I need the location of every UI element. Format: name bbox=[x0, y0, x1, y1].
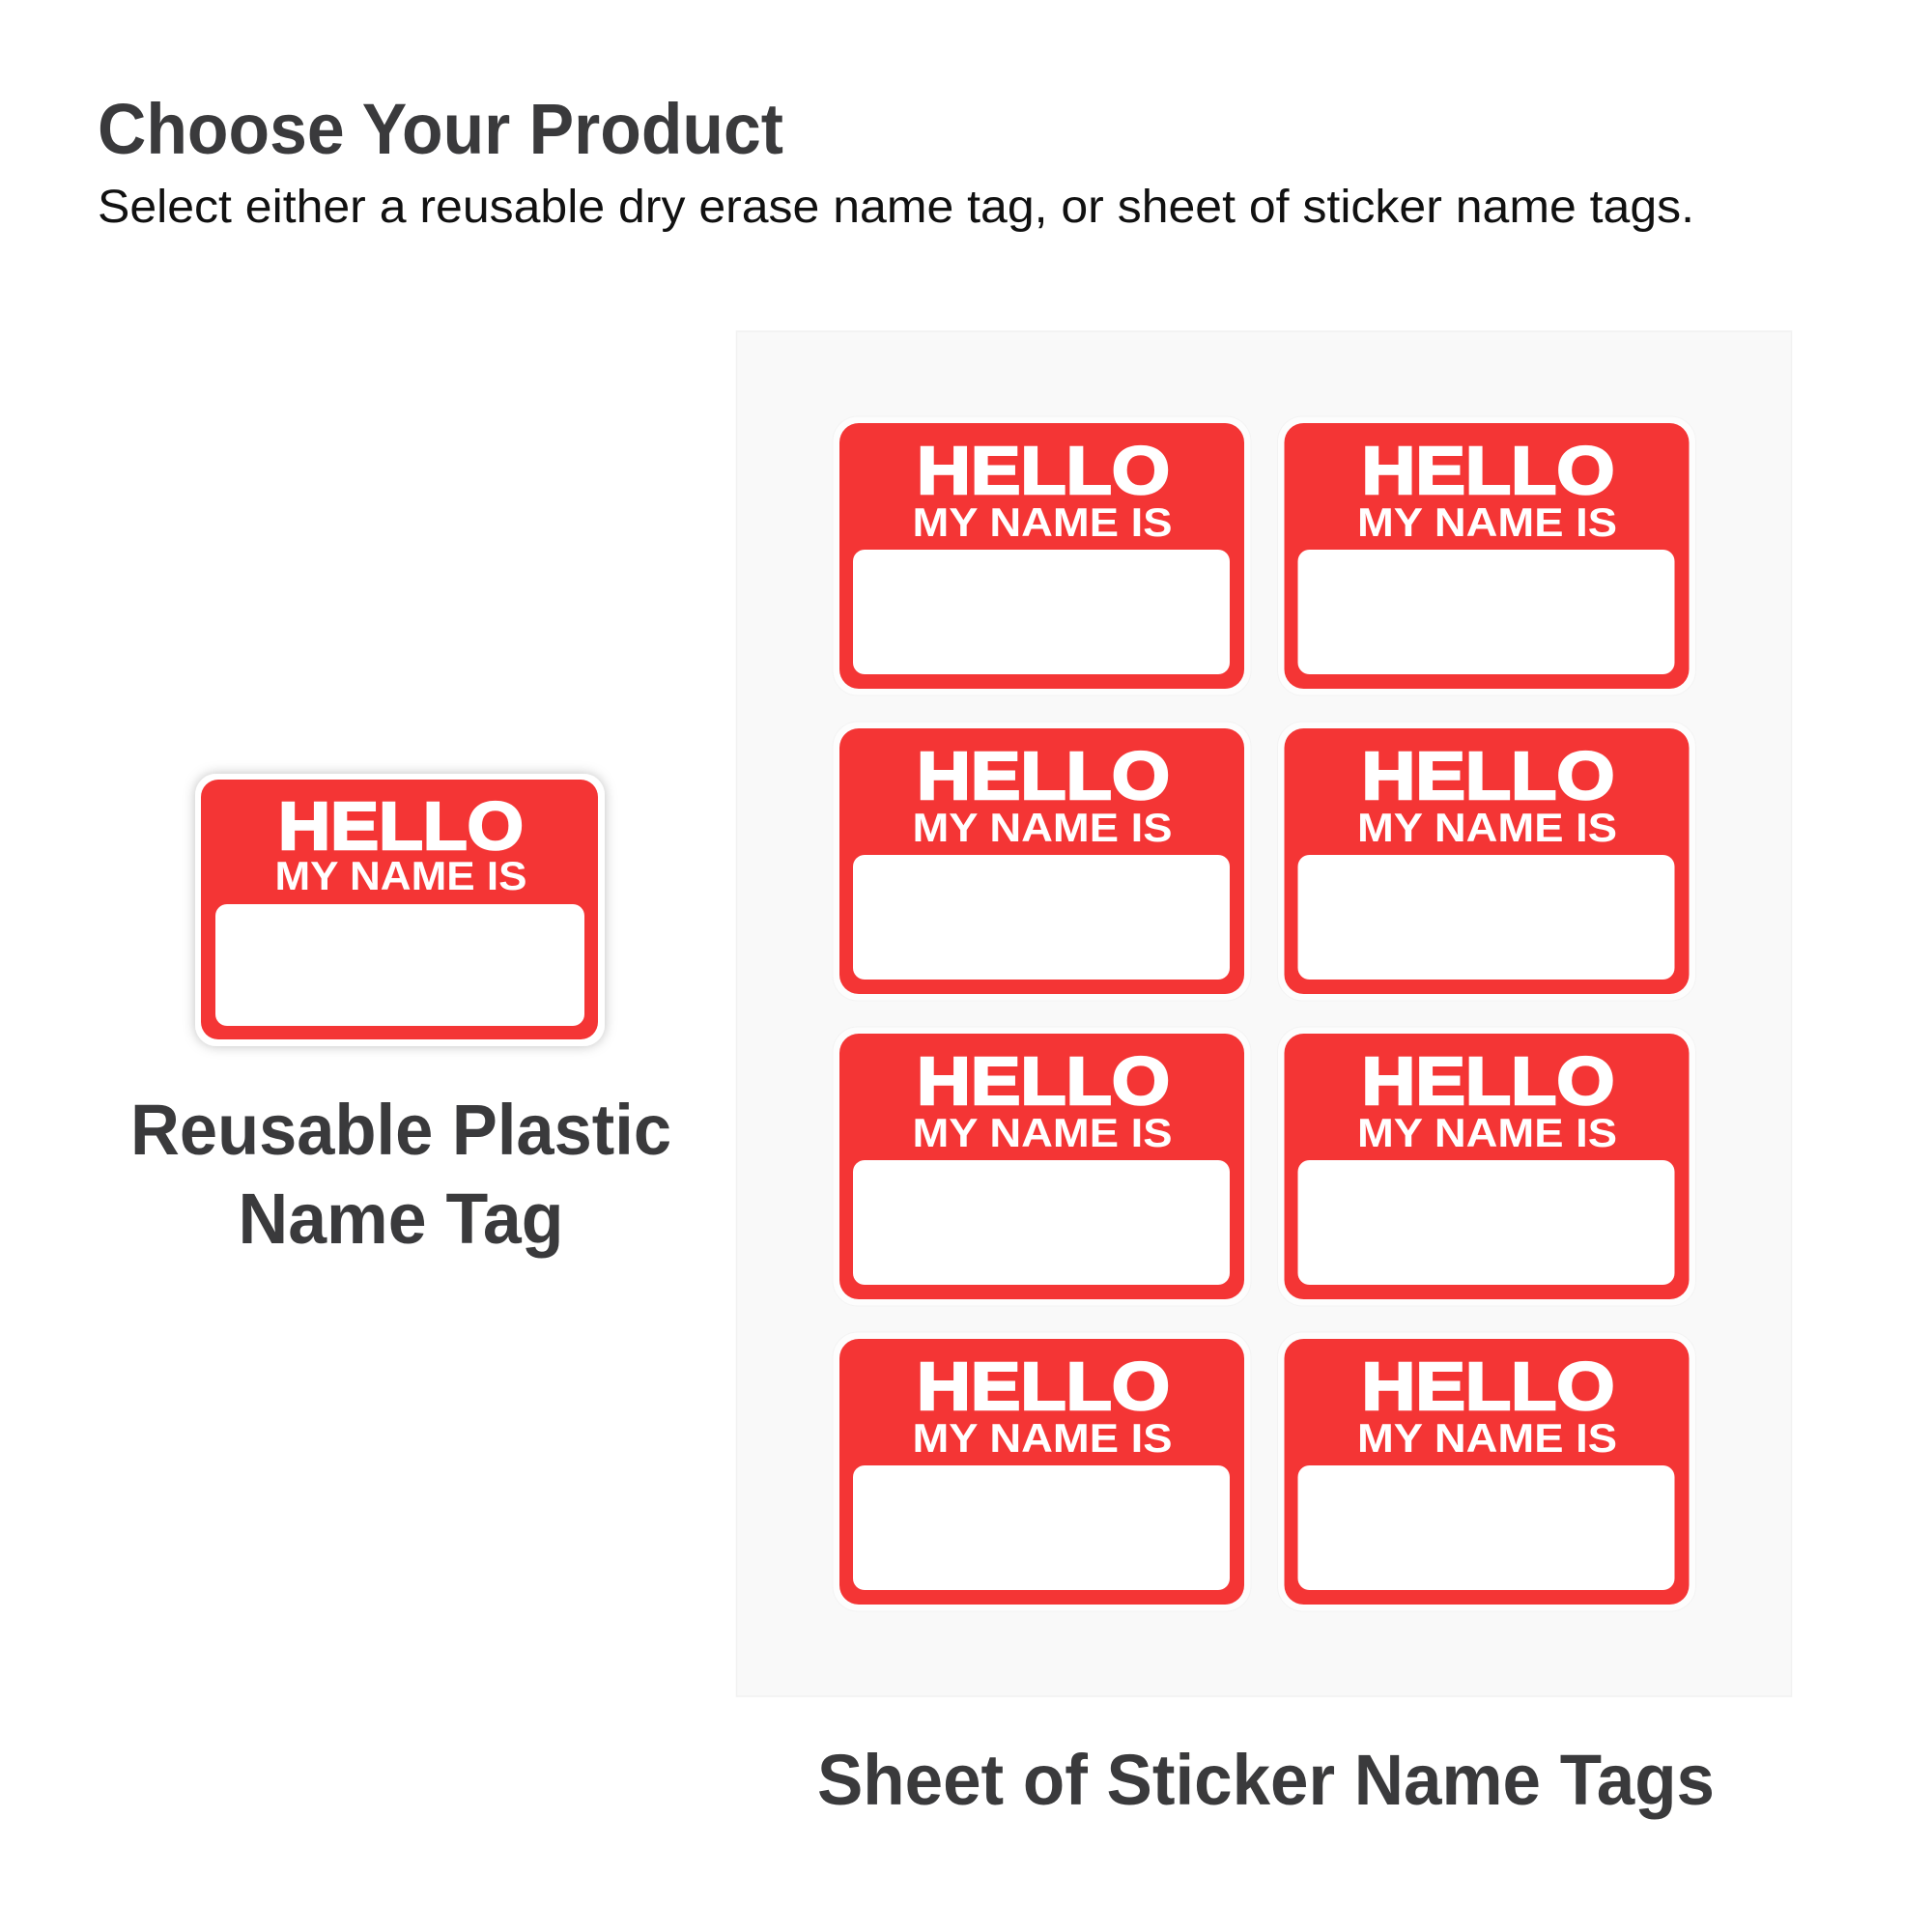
subtitle: Select either a reusable dry erase name tag, or sheet of sticker name tags. bbox=[98, 182, 1694, 233]
tag red body bbox=[201, 780, 598, 1039]
sticker row 3 right: MY NAME IS bbox=[1357, 1110, 1617, 1155]
sticker row 4 left: HELLO bbox=[917, 1349, 1170, 1424]
sticker row 3 right: HELLO bbox=[1362, 1043, 1615, 1119]
sticker row 1 right: HELLO bbox=[1362, 433, 1615, 508]
sticker row 4 right: MY NAME IS bbox=[1357, 1415, 1617, 1461]
sticker row 3 left: HELLO bbox=[917, 1043, 1170, 1119]
sticker row 4 left bbox=[833, 1332, 1251, 1611]
sticker row 2 right: HELLO bbox=[1362, 738, 1615, 813]
sticker row 2 left: MY NAME IS bbox=[912, 805, 1173, 850]
sticker row 4 left: MY NAME IS bbox=[912, 1415, 1173, 1461]
sticker row 2 left bbox=[833, 722, 1251, 1001]
sticker row 4 right bbox=[1277, 1332, 1696, 1611]
sticker row 1 right: MY NAME IS bbox=[1357, 499, 1617, 545]
sticker row 4 right: HELLO bbox=[1362, 1349, 1615, 1424]
sticker row 3 left bbox=[833, 1027, 1251, 1306]
sticker row 2 right: MY NAME IS bbox=[1357, 805, 1617, 850]
sheet background bbox=[736, 331, 1791, 1696]
title: Choose Your Product bbox=[98, 89, 783, 169]
sticker row 1 right bbox=[1277, 416, 1696, 696]
tag hello text: HELLO bbox=[278, 788, 524, 864]
sticker row 2 left: HELLO bbox=[917, 738, 1170, 813]
label: reusable plastic name tag: Name Tag bbox=[238, 1179, 564, 1259]
tag backing bbox=[195, 774, 605, 1046]
sticker row 1 left: HELLO bbox=[917, 433, 1170, 508]
label: reusable plastic name tag: Reusable Plastic bbox=[130, 1090, 671, 1170]
panel: sticker sheet bbox=[736, 331, 1791, 1696]
panel: reusable plastic name tag bbox=[195, 774, 605, 1046]
sticker row 2 right bbox=[1277, 722, 1696, 1001]
sticker row 3 left: MY NAME IS bbox=[912, 1110, 1173, 1155]
label: sheet of sticker name tags: Sheet of Sticker Name Tags bbox=[817, 1740, 1715, 1820]
tag my name is text: MY NAME IS bbox=[274, 853, 527, 898]
sticker row 1 left: MY NAME IS bbox=[912, 499, 1173, 545]
sticker row 3 right bbox=[1277, 1027, 1696, 1306]
tag write-in area bbox=[215, 904, 584, 1026]
sticker row 1 left bbox=[833, 416, 1251, 696]
